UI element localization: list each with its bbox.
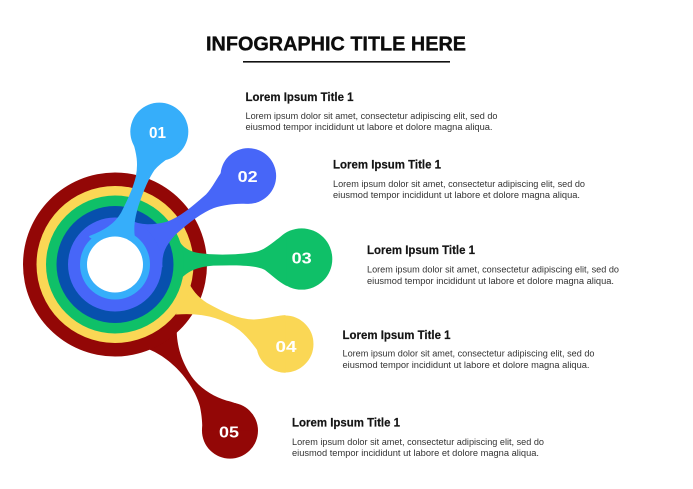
text block 4 (342, 328, 594, 370)
text block 2: eiusmod tempor incididunt ut labore et dolore magna aliqua. (333, 190, 580, 200)
center hole (87, 236, 143, 292)
ring blue (68, 218, 162, 312)
petal 05 dark red (140, 310, 258, 459)
text block 2 (333, 158, 585, 200)
text block 5: eiusmod tempor incididunt ut labore et dolore magna aliqua. (292, 448, 539, 458)
text block 3: eiusmod tempor incididunt ut labore et dolore magna aliqua. (367, 276, 614, 286)
text block 2: Lorem Ipsum Title 1 (333, 158, 441, 172)
ring yellow (36, 186, 194, 343)
text block 2: Lorem ipsum dolor sit amet, consectetur adipiscing elit, sed do (333, 179, 585, 189)
number 02: 02 (238, 169, 258, 186)
number 05: 05 (219, 425, 239, 442)
ring dark blue (56, 206, 174, 323)
text block 3: Lorem Ipsum Title 1 (367, 243, 475, 257)
petal 03 green (160, 228, 332, 290)
text block 5 (292, 416, 544, 458)
title: INFOGRAPHIC TITLE HERE (206, 34, 466, 56)
ring green (46, 196, 184, 334)
number 01: 01 (149, 125, 166, 142)
text block 1: Lorem ipsum dolor sit amet, consectetur adipiscing elit, sed do (246, 111, 498, 121)
petal 01 sky blue (90, 103, 188, 250)
petal 04 yellow (177, 280, 313, 372)
text block 3 (367, 243, 619, 286)
title underline (243, 61, 450, 63)
text block 1 (246, 90, 498, 132)
text block 3: Lorem ipsum dolor sit amet, consectetur adipiscing elit, sed do (367, 264, 619, 274)
number 04: 04 (276, 339, 297, 356)
text block 4: Lorem Ipsum Title 1 (342, 328, 451, 342)
number 03: 03 (292, 250, 312, 268)
text block 4: eiusmod tempor incididunt ut labore et dolore magna aliqua. (342, 360, 590, 370)
text block 1: eiusmod tempor incididunt ut labore et dolore magna aliqua. (246, 122, 492, 132)
text block 4: Lorem ipsum dolor sit amet, consectetur adipiscing elit, sed do (342, 348, 594, 358)
text block 1: Lorem Ipsum Title 1 (246, 90, 354, 104)
petal 02 blue (132, 148, 276, 267)
text block 5: Lorem Ipsum Title 1 (292, 416, 400, 430)
ring dark red (23, 172, 207, 356)
ring sky blue (80, 230, 150, 300)
diagram: concentric rings with petals (23, 103, 332, 459)
text block 5: Lorem ipsum dolor sit amet, consectetur adipiscing elit, sed do (292, 437, 544, 447)
